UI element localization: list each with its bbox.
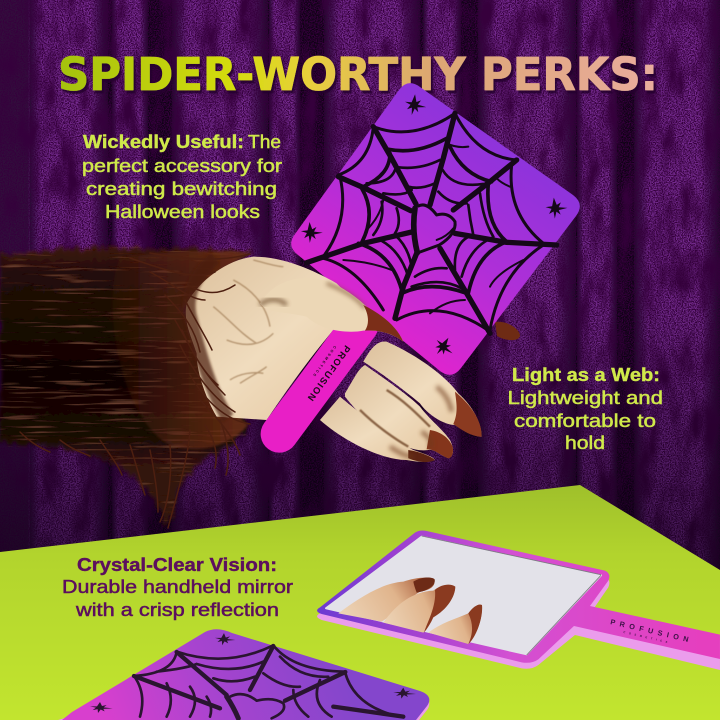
text block: wickedly useful: The xyxy=(248,132,281,152)
table surface xyxy=(0,485,720,720)
brand name on mirror handle: COSMETICS xyxy=(623,630,668,644)
text block: wickedly useful: perfect accessory for xyxy=(82,156,282,176)
card edge xyxy=(58,633,429,720)
brand name on handle: COSMETICS xyxy=(312,345,337,378)
blurred fur shadow along wrist xyxy=(189,258,228,418)
fingernail behind mirror xyxy=(495,322,520,340)
text block: light as a web: Lightweight and xyxy=(508,388,663,408)
palm xyxy=(186,257,370,420)
text block: crystal-clear vision xyxy=(62,555,293,620)
mirror back with spider web xyxy=(291,83,580,375)
mirror frame lip xyxy=(317,534,720,670)
brand name on mirror handle: PROFUSION xyxy=(610,617,689,644)
mirror card xyxy=(291,83,580,375)
text block: light as a web: hold xyxy=(565,433,605,453)
text block: light as a web: comfortable to xyxy=(514,411,656,431)
text block: wickedly useful: Halloween looks xyxy=(105,202,260,222)
second mirror back on table xyxy=(58,629,429,720)
fur strands xyxy=(20,253,250,528)
text block: crystal-clear vision: with a crisp reflection xyxy=(75,600,279,620)
brand name on handle: PROFUSION xyxy=(305,343,352,403)
fingers xyxy=(320,341,482,462)
mirror glass xyxy=(326,537,601,654)
text block: crystal-clear vision: Crystal-Clear Vision: xyxy=(77,555,277,575)
reflected fingers xyxy=(338,578,482,644)
mirror frame face xyxy=(317,530,720,663)
text block: wickedly useful: creating bewitching xyxy=(86,179,277,199)
palm creases xyxy=(213,260,283,383)
hand holding mirror xyxy=(186,257,482,462)
fur overlapping palm edge xyxy=(20,253,250,528)
fur arm xyxy=(0,248,252,526)
text block: light as a web xyxy=(508,365,663,453)
thumb xyxy=(260,278,403,342)
mirror handle xyxy=(279,325,360,434)
mirror lying on table xyxy=(317,530,720,670)
text block: wickedly useful xyxy=(82,132,282,222)
spider web and stars xyxy=(300,94,569,361)
text block: wickedly useful: Wickedly Useful: xyxy=(83,132,244,152)
squashed web and stars xyxy=(90,633,416,718)
title: SPIDER-WORTHY PERKS: xyxy=(58,48,658,101)
card face xyxy=(62,629,429,720)
text block: light as a web: Light as a Web: xyxy=(512,365,660,385)
glass edge xyxy=(422,536,601,655)
text block: crystal-clear vision: Durable handheld mirror xyxy=(62,577,293,597)
